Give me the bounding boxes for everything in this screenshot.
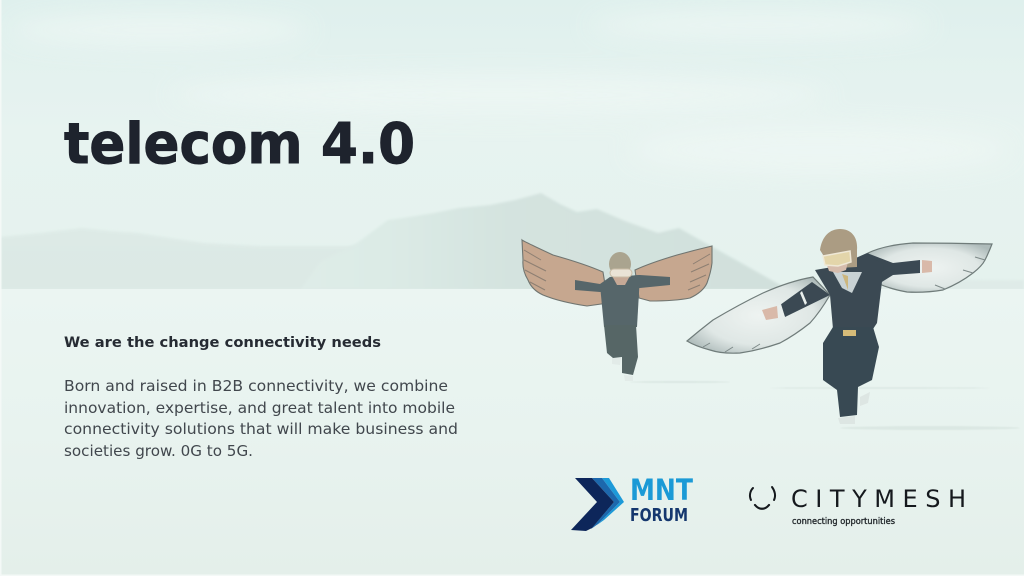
shoes [612,358,633,381]
body text: societies grow. 0G to 5G. [64,443,253,460]
left silver wing [687,277,830,353]
title: telecom 4.0 [64,112,415,177]
body text [64,378,458,460]
background: clouds [10,11,1010,174]
illustration: small child with brown wings [522,240,712,381]
shoes [838,392,870,424]
head: aviator cap [820,229,857,268]
FORUM wordmark: FORUM [630,505,688,526]
background: main mountain [300,193,785,290]
right arm [867,253,920,285]
trousers [823,327,879,417]
background: ground shadows [630,381,1020,430]
illustration: large child with silver wings [687,229,992,424]
background: far right hills [785,279,1024,290]
face [611,274,631,285]
right brown wing [635,246,712,301]
torso [600,275,640,327]
goggles [823,251,851,266]
chevron mark [571,478,624,531]
sleeve cuffs [778,291,807,318]
hands [762,260,932,320]
logo: Citymesh [750,485,966,527]
collar [833,272,862,293]
arms [575,275,670,292]
body text: Born and raised in B2B connectivity, we combine [64,378,448,395]
citymesh wordmark: CITYMESH [791,485,966,513]
citymesh icon [750,487,775,509]
right silver wing [868,243,992,292]
body text: connectivity solutions that will make business and [64,421,458,438]
goggles [610,269,632,277]
logo: MNT Forum [571,473,693,531]
body text: innovation, expertise, and great talent into mobile [64,400,455,417]
left arm [780,282,830,317]
tie [842,274,848,290]
background: salt flat ground [0,289,1024,576]
left brown wing [522,240,608,306]
belt buckle [843,330,856,336]
jacket [815,253,884,329]
face [826,262,848,273]
head [609,252,631,276]
citymesh tagline: connecting opportunities [792,516,895,527]
legs [604,325,638,375]
MNT wordmark: MNT [630,473,693,507]
background: far left mountains [0,228,400,290]
wing feather lines [524,250,710,290]
subheading: We are the change connectivity needs [64,334,381,351]
background: sky [0,0,1024,290]
wing feather ticks [703,257,985,352]
